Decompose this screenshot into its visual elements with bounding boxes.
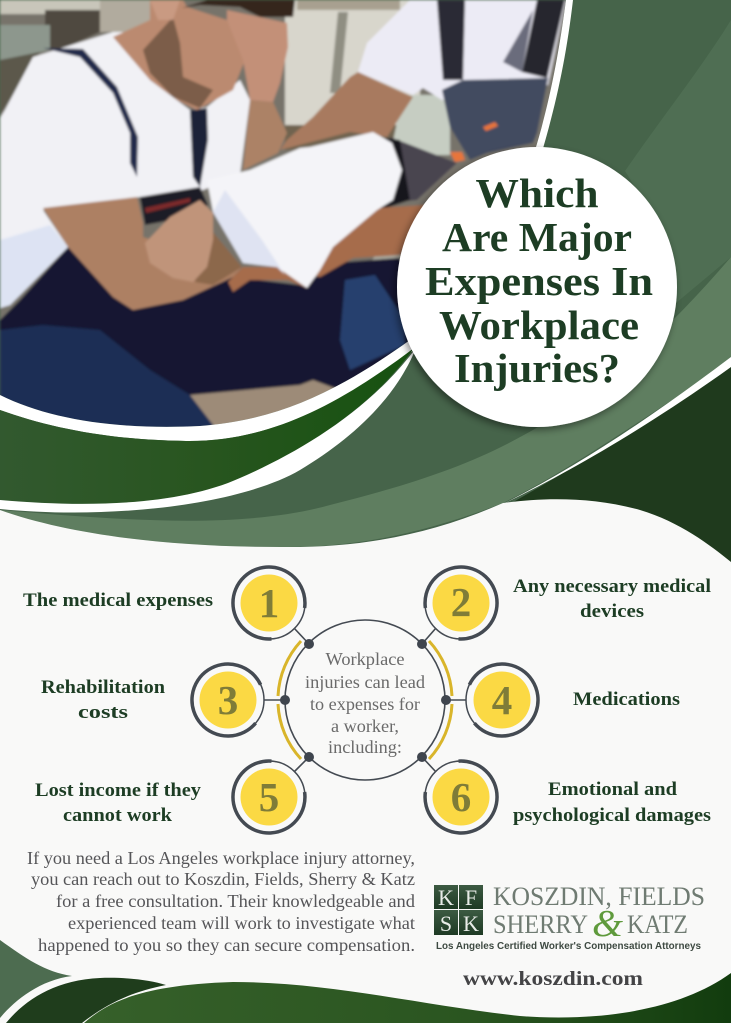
white strip right of photo [532,0,573,165]
left mid green wave [0,940,72,1018]
left worker hand [145,200,213,282]
title circle [397,147,677,427]
badge 3 [192,664,264,736]
badge 4: 4 [492,677,512,723]
logo tagline: Los Angeles Certified Worker's Compensation Attorneys [436,940,701,952]
nodes [280,639,451,762]
forearm of raised arm [243,100,287,170]
title: Injuries? [454,345,620,391]
hairy wrist [194,234,242,286]
badge 2 [425,567,497,639]
badge 5 [233,761,305,833]
right worker shirt [358,0,566,100]
label 5: cannot work [63,805,172,826]
upper right lighter swath [625,20,731,303]
white curve right [503,357,731,504]
logo wordmark: KATZ [627,910,688,939]
overall straps [43,48,138,177]
closing paragraph [27,848,415,955]
logo monogram: K [438,885,454,910]
connectors [264,628,466,772]
beard [143,17,213,108]
badge 5: 5 [259,774,279,820]
white strip below photo [0,340,414,441]
logo wordmark: KOSZDIN, FIELDS [493,882,705,911]
closing paragraph: happened to you so they can secure compensation. [38,935,415,955]
logo wordmark [493,882,705,945]
closing paragraph: If you need a Los Angeles workplace injury attorney, [27,848,415,868]
logo wordmark: SHERRY [493,910,588,939]
central text [305,649,425,757]
central text: injuries can lead [305,672,425,692]
badge 6: 6 [451,774,471,820]
logo monogram: F [465,885,477,910]
right worker straps [437,0,465,80]
raised hand [227,10,288,102]
label 6: psychological damages [513,805,711,826]
photo: injured worker [0,0,570,430]
right worker upper arm [280,72,413,150]
badge 4 [466,664,538,736]
central text: Workplace [326,649,405,669]
logo monogram [434,885,483,936]
dark green band [0,348,414,504]
title [425,170,653,391]
label 3 [41,677,165,723]
left worker shirt [0,30,252,245]
label 3: costs [78,702,128,723]
olive green wave [84,973,731,1023]
title: Which [476,170,599,216]
label 6 [513,779,711,826]
badge 3: 3 [218,677,238,723]
gray patch right of knee [372,254,401,262]
logo monogram: K [463,911,479,936]
right worker lower arm and hand [228,205,425,292]
title: Are Major [442,214,632,260]
left worker forearm [43,197,242,310]
navy trousers [0,247,408,396]
closing paragraph: experienced team will work to investigate what [68,913,415,933]
label 2: Any necessary medical [513,576,711,597]
central text: including: [328,737,402,757]
label 2: devices [580,601,644,622]
label 5 [35,780,202,826]
logo wordmark: & [592,903,623,945]
light green swoosh band [0,257,731,547]
title: Expenses In [425,258,653,304]
blue knee highlight [340,275,405,370]
label 2 [513,576,711,622]
overall bib [140,187,208,225]
beige floor [188,378,336,425]
badge 1 [233,567,305,639]
right worker apron [442,78,548,160]
dark object [390,137,457,202]
badge 1: 1 [259,580,279,626]
dark green wave [6,978,166,1023]
title: Workplace [439,302,639,348]
label 4: Medications [573,689,680,710]
label 1: The medical expenses [23,590,213,611]
neck and face [113,0,245,110]
label 5: Lost income if they [35,780,202,801]
central text: to expenses for [310,694,420,714]
logo monogram: S [440,911,452,936]
white strip under band [0,348,416,513]
closing paragraph: for a free consultation. Their knowledgeable and [56,891,415,911]
label 6: Emotional and [548,779,677,800]
hair [182,0,295,17]
item labels [23,576,711,826]
label 3: Rehabilitation [41,677,165,698]
ear [150,0,180,20]
blue thigh [0,325,220,430]
closing paragraph: you can reach out to Koszdin, Fields, Sherry & Katz [31,869,415,889]
central circle [285,620,445,780]
yellow arcs [278,641,452,759]
bottom waves [0,940,731,1023]
dark green right corner [508,366,731,640]
orange tabs [483,122,498,131]
hub diagram [192,567,538,833]
website: www.koszdin.com [463,968,643,990]
logo [434,882,705,952]
white lower panel [0,499,731,1023]
badge 2: 2 [451,579,471,625]
central text: a worker, [331,716,399,736]
white bandage [207,132,402,288]
badge 6 [425,761,497,833]
